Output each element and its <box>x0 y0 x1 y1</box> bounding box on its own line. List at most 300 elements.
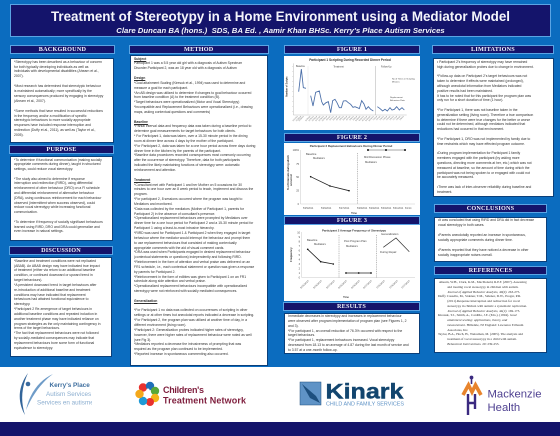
panel: discussion: condition, or continued downward or upward trend in <box>14 273 93 277</box>
phase divider <box>356 153 358 204</box>
logo strip <box>0 367 560 422</box>
x axis labels: 7/26/2014 <box>389 279 399 290</box>
panel: limitations: participant was not being spoken to or engaged with could not <box>437 171 530 175</box>
panel: purpose: learned using RIRD, DRO and DRA could generalize and <box>14 225 100 229</box>
panel: limitations: questions, directing more comments at her, etc.) which was not <box>437 161 532 165</box>
phase labels <box>296 65 392 68</box>
panel: limitations <box>433 58 554 197</box>
date labels: 6/11/14 <box>359 115 365 122</box>
date labels: 5/24/14 <box>305 115 312 122</box>
chart title: Participant 2 Average Frequency of Stereotypy <box>322 228 386 232</box>
panel: limitations: only run for a short duration of time (1 hour). <box>437 98 503 102</box>
panel: method: *Consultant met with Participant 1 and her Mother on 5 occasions for 30 <box>134 183 242 187</box>
x axis labels: 5/26/2014 <box>313 279 323 290</box>
panel: references: and treating vocal stereotypy in children with autism. <box>447 285 519 289</box>
axes <box>302 232 415 278</box>
panel: purpose: communication. <box>14 210 38 214</box>
logo: Children's Treatment Network: Treatment Network <box>163 396 247 406</box>
panel: purpose: *The study also aimed to determine if response <box>14 177 85 181</box>
x axis labels: 5/25/2014 <box>303 208 314 210</box>
panel: method: *An AB design was utilized to determine if changes to goal behaviour occurred <box>134 90 251 94</box>
panel: references: Taylor, B.A., Hoch, H., Weissman, M. (2005). The analysis and <box>438 332 523 336</box>
panel: method: minutes to one hour over an 8 week period to teach, implement and discuss the <box>134 187 253 191</box>
panel: method: (contextual statements or questions) independently and following RIRD. <box>134 255 242 259</box>
panel: method: maps, asking contextual questions and comments) <box>134 110 210 114</box>
heading: conclusions <box>434 204 547 213</box>
logo: Mackenzie Health: Health <box>488 402 520 414</box>
generalization line <box>383 238 409 252</box>
heading: references <box>434 266 547 275</box>
x axis labels: 5/30/2014 <box>381 208 392 210</box>
panel: references <box>434 278 547 353</box>
panel: limitations: treatment. <box>437 190 452 194</box>
heading: purpose: PURPOSE <box>46 146 77 153</box>
heading: figure 3 <box>284 216 420 225</box>
panel: discussion: equivalence to stereotypy. <box>14 346 53 350</box>
date labels: 6/4/14 <box>336 115 342 121</box>
phase labels: Generalization <box>381 232 399 236</box>
heading: discussion: DISCUSSION <box>41 247 81 254</box>
panel: method: schedule along side attention and verbal praise. <box>134 279 206 283</box>
panel: limitations: high during generalization probes due to change in environment. <box>437 65 534 69</box>
panel: method: *Target behaviours were operationalized (Motor and Vocal Stereotypy) <box>134 100 239 104</box>
panel: method: *For Participant 2, the program plan was utilized at another time of day, in a <box>134 318 247 322</box>
x axis labels: 7/25/2014 <box>376 279 386 290</box>
panel: references: Journal of Applied Behavior Analysis, 40(2): 263-275. <box>447 290 520 294</box>
panel: limitations: members engaged with the participant (by asking more <box>437 156 520 160</box>
date labels: 6/5/14 <box>339 115 345 121</box>
date labels: 5/29/14 <box>322 115 329 122</box>
panel: discussion: target behaviours). <box>14 278 42 282</box>
treatment line <box>311 91 373 113</box>
y axis labels: 50 <box>296 176 300 179</box>
panel: discussion: *Participant 2 Re-emergence of target behaviours in <box>14 307 92 311</box>
panel: method: *DRA was used when Participants engaged in desired replacement behaviour <box>134 250 250 254</box>
y axis labels: 8 <box>299 240 301 244</box>
panel: method: *For Participant 1 no data was collected on occurrences of scripting in other <box>134 308 247 312</box>
panel: method: *Reported increase in spontaneous commenting also occurred. <box>134 352 229 356</box>
panel: conclusions: •Parents reported that they have noticed a decrease in other <box>438 248 529 252</box>
date labels <box>293 115 405 122</box>
panel: conclusions: vocal stereotypy in both cases. <box>438 223 484 227</box>
phase labels: Mediators <box>365 160 377 164</box>
logo: Kerry's Place: Autism Services <box>46 391 91 398</box>
heading: results <box>283 302 420 311</box>
panel: conclusions: •Parents anecdotally reported an increase in spontaneous, <box>438 233 526 237</box>
phase labels: Post Program Plan <box>344 239 367 243</box>
x axis labels: 5/31/2014 <box>393 208 404 210</box>
chart: figure 2 percentage line chart: occurred <box>289 174 293 186</box>
panel: method: behaviour where the mediator would interrupt the behaviour and prompt them <box>134 236 250 240</box>
panel: background: sensory consequences produced by engaging in stereotypy <box>14 94 103 98</box>
panel: method: *For participant 2, 8 sessions occurred where the program was taught to <box>134 197 242 201</box>
panel: purpose: settings, could reduce vocal stereotypy. <box>14 167 73 171</box>
date labels: 5/19/14 <box>299 115 305 122</box>
heading: references: REFERENCES <box>469 267 512 274</box>
y axis label: Number of Scripts <box>286 76 289 97</box>
panel: discussion: re-introduction of additional baseline and treatment <box>14 288 90 292</box>
heading: results: RESULTS <box>337 303 366 310</box>
panel: references: Duffy Cassella, M., Sidener, T.M., Sidener, D.W., Progar, P.R. <box>438 294 521 298</box>
panel: method: FR1 schedule, i.e., each contextual statement or question was given a response <box>134 265 254 269</box>
phase labels <box>307 232 399 254</box>
panel: purpose: observed (intermittent when success observed), could <box>14 201 95 205</box>
panel: purpose: interruption and redirection (RIRD), using differential <box>14 181 92 185</box>
panel: method: dinner time for a one hour period for Participant 2 and a 15-30 minute period for <box>134 221 253 225</box>
date labels: 7/7/14 <box>393 115 399 121</box>
legend: No of Times in Scripting <box>392 77 416 80</box>
title banner <box>10 4 551 37</box>
panel: purpose: and differential reinforcement of alternative behaviour <box>14 191 94 195</box>
panel: limitations: could not be determined, although mediators indicated that <box>437 122 525 126</box>
panel: method: Treatment <box>134 178 150 182</box>
date labels: 6/10/14 <box>355 115 362 122</box>
panel: limitations: reductions had occurred in that environment. <box>437 127 504 131</box>
panel: background: 2007). <box>14 74 24 78</box>
panel: discussion: by socially-mediated consequences may indicate that <box>14 336 94 340</box>
date labels: 6/13/14 <box>365 115 372 122</box>
panel: limitations: It has to be noted that for this participant the program plan was <box>437 94 531 98</box>
panel: limitations: positive results had been maintained. <box>437 89 493 93</box>
y axis labels: 0 <box>298 203 300 206</box>
panel: discussion: program strategies as the only maintaining contingency in <box>14 322 101 326</box>
x axis labels: 6/27/2014 <box>363 279 373 290</box>
date labels: 7/9/14 <box>399 115 405 121</box>
panel: purpose <box>10 156 113 241</box>
panel: references: Associates, Inc. <box>447 328 468 332</box>
panel: method: indicated the likely maintaining functions of stereotypy were: automatic <box>134 163 240 167</box>
panel: limitations: •There was lack of inter-observer reliability during baseline and <box>437 185 531 189</box>
x axis title: Time <box>351 212 358 215</box>
legend <box>390 77 416 102</box>
panel: limitations: taken to determine if effects were maintained (prolonged), <box>437 79 524 83</box>
panel: references: Journal of Applied Behavior Analysis, 44(1): 169-173. <box>447 308 520 312</box>
panel: limitations: •During program implementation for Participant 1 family <box>437 151 520 155</box>
panel: method: *For Participant 2, data was taken for a one hour period across three days during <box>134 144 255 148</box>
panel: background: responses have included response interruption and <box>14 123 91 127</box>
phase labels: Mediators <box>346 244 358 248</box>
panel: discussion: additional baseline conditions and repeated induction in <box>14 312 97 316</box>
panel: method: Generalization <box>134 299 157 303</box>
y axis labels: 2 <box>299 268 301 270</box>
panel: method: *Incompatible and Replacement Behaviours were operationalized (i.e., drawing <box>134 105 253 109</box>
panel: discussion: terms of the target behaviours. <box>14 326 60 330</box>
panel: method: different environment (living room). <box>134 323 186 327</box>
panel: method: *Mediators reported a decrease the intrusiveness of prompting that was <box>134 342 241 346</box>
x axis labels: 6/25/2014 <box>338 279 348 290</box>
data line <box>311 177 349 191</box>
panel: limitations: time restraints which may have effected program outcome. <box>437 142 525 146</box>
title banner: Treatment of Stereotypy in a Home Environment using a Mediator Model <box>51 9 510 24</box>
phase dividers <box>339 235 377 278</box>
panel: background: for both typically developing individuals as well as <box>14 64 88 68</box>
panel: discussion: *A persistent downward trend in target behaviours after <box>14 283 97 287</box>
panel: limitations: *For Participant 1, there was not baseline taken in the <box>437 108 517 112</box>
panel: method: *Data was collected by the mediators (Mother of Participant 1, parents for <box>134 207 244 211</box>
heading: limitations <box>432 45 554 54</box>
heading: figure 1: FIGURE 1 <box>337 46 367 53</box>
legend: Behaviour Rate <box>390 99 406 102</box>
panel: method: program. <box>134 192 148 196</box>
heading: limitations: LIMITATIONS <box>471 46 515 53</box>
panel: results: *For participant 1, an overall reduction of 76.3% occurred with respect to the <box>288 329 402 333</box>
title banner: Clare Duncan BA (hons.) SDS, BA Ed. , Aamir Khan BHSc. Kerry's Place Autism Services <box>116 26 445 34</box>
heading: figure 2 <box>284 133 420 142</box>
phase labels <box>306 152 391 164</box>
date labels: 6/6/14 <box>343 115 349 121</box>
panel: method: Baseline <box>134 120 148 124</box>
x axis labels: 5/26/2014 <box>321 208 332 210</box>
date labels: 5/25/14 <box>309 115 315 122</box>
panel: conclusions: •It was concluded that using RIRD and DRA did in fact decrease <box>438 218 534 222</box>
date labels: 7/1/14 <box>373 115 379 121</box>
panel: method: stereotypy were not reinforced with socially mediated consequences. <box>134 289 237 293</box>
panel: discussion: *The fact that replacement behaviours were not followed <box>14 331 99 335</box>
baseline line <box>299 69 306 92</box>
panel: background: *Stereotypy has been described as a behaviour of concern <box>14 60 102 64</box>
panel: references: Behavioral Interventions. 20: 239-253. <box>447 342 499 346</box>
panel: limitations: although anecdotal information from Mediators indicated <box>437 84 521 88</box>
panel: method: *Partial interval data and frequency data was taken during a baseline period to <box>134 124 251 128</box>
panel: results: were observed after program implementation of program plan (see Figures 1, 2 <box>288 319 407 323</box>
logo: Children's Treatment Network: Children's <box>163 385 204 395</box>
panel: method: Subject <box>134 57 146 61</box>
panel: method: Design <box>134 76 145 80</box>
panel: discussion: (ABAB). An ABAB design may have indicated true impact <box>14 264 100 268</box>
panel: method <box>130 55 268 366</box>
logo: Children's Treatment Network <box>135 382 247 406</box>
panel: limitations: *Follow-up data on Participant 2's target behaviours was not <box>437 74 527 78</box>
panel: discussion: of treatment (either via return to an additional baseline <box>14 268 95 272</box>
logo: Kinark Child and Family Services: Kinark <box>326 380 404 404</box>
heading: figure 3: FIGURE 3 <box>337 217 367 224</box>
panel: method: Participant 1 using a least-to-most intrusive hierarchy. <box>134 226 214 230</box>
panel: discussion: conditions may have indicated that replacement <box>14 293 86 297</box>
phase labels: Mid Discussion Phase <box>364 155 391 159</box>
x axis labels: 5/27/2014 <box>339 208 350 210</box>
date labels: 6/2/14 <box>329 115 335 121</box>
logo: Kerry's Place <box>20 373 92 415</box>
panel: purpose: even increase in natural settings. <box>14 229 64 233</box>
date labels: 5/26/14 <box>312 115 319 122</box>
logo: Kerry's Place: Kerry's Place <box>50 382 90 389</box>
panel: results: decreased from 18.13 to an average of 4.87 during the last month of service and <box>288 343 409 347</box>
panel: discussion: stereotypy. <box>14 302 30 306</box>
panel: discussion: *Baseline and treatment conditions were not replicated <box>14 259 96 263</box>
panel: purpose: *To determine if functional communication (making socially <box>14 158 102 162</box>
panel: background: *Some methods that have resulted in successful reductions <box>14 109 103 113</box>
x axis labels: 5/27/2014 <box>326 279 336 290</box>
heading: figure 2: FIGURE 2 <box>337 134 367 141</box>
panel: method: required as the program plan continued to be implemented. <box>134 347 223 351</box>
panel: method: determine goal measurements for target behaviours for both clients. <box>134 129 236 133</box>
panel: method: *Participant 2: Generalization probes indicated higher rates of stereotypy, <box>134 328 244 332</box>
panel: background: (Ahearn et al., 2007). <box>14 99 46 103</box>
chart title: Participant 2 Replacement Behaviours During Dinner Period <box>310 144 393 148</box>
panel: method: Participant 1 was a 5.5 year old girl with a diagnosis of Autism Spectrum <box>134 61 242 65</box>
legend <box>367 149 406 151</box>
panel: results: to 3.57 at a one-month follow-up. <box>288 348 338 352</box>
panel: discussion <box>10 257 112 357</box>
date labels: 6/12/14 <box>362 115 369 122</box>
date labels: 7/3/14 <box>379 115 385 121</box>
legend: Replacement <box>390 96 403 99</box>
panel: method: *Reinforcement in the form of edibles was given to Participant 1 on an FR1 <box>134 275 246 279</box>
panel: purpose: *To determine if frequency of socially significant behaviours <box>14 220 103 224</box>
phase labels: During Repair <box>380 250 397 254</box>
date labels: 5/18/14 <box>296 115 303 122</box>
chart: figure 1 line chart of scripting <box>284 56 420 130</box>
panel: references: attainment scaling: applications, theory, and <box>447 318 507 322</box>
panel: background: redirection (Duffy et al., 2011), as well as (Taylor et al., <box>14 128 95 132</box>
heading: method: METHOD <box>184 46 213 53</box>
panel: discussion: behaviours had attained functional equivalence to <box>14 297 88 301</box>
phase labels: Follow-Up <box>381 66 392 68</box>
y axis labels: 6 <box>299 250 301 252</box>
date labels: 6/1/14 <box>326 115 332 121</box>
chart: figure 2 percentage line chart <box>284 143 420 215</box>
panel: method: *Goal attainment Scaling (Kiresuk et al., 1994) was used to determine and <box>134 81 245 85</box>
heading: method <box>129 45 268 54</box>
panel: method: however, there were higher rates of replacement behaviour were noted as well <box>134 333 252 337</box>
heading: background <box>10 45 115 54</box>
panel: conclusions <box>434 217 546 262</box>
panel: discussion: replacement behaviours bore some form of functional <box>14 341 94 345</box>
panel: background: is maintained automatically; more specifically by the <box>14 89 92 93</box>
panel: method: settings or at other times but anecdotal reports indicated a decrease in scripting. <box>134 313 254 317</box>
x axis labels: 6/26/2014 <box>351 279 361 290</box>
x axis title: Time <box>343 296 350 299</box>
panel: limitations: measured at baseline, so the amount of time during which the <box>437 166 530 170</box>
panel: conclusions: socially appropriate comments during dinner time. <box>438 238 513 242</box>
panel: references: measurement. Hillsdale, NJ England: Lawrence Erlbaum <box>447 323 523 327</box>
date labels: 7/6/14 <box>389 115 395 121</box>
phase divider <box>374 66 376 115</box>
panel: method: appropriate comments with the aid of visual comment cards. <box>134 246 224 250</box>
x axis labels <box>303 208 412 210</box>
panel: conclusions: socially inappropriate noises overall. <box>438 253 492 257</box>
heading: background: BACKGROUND <box>39 46 86 53</box>
panel: results: *For participant 1, replacement behaviours increased. Vocal stereotypy <box>288 338 394 342</box>
panel: references: treatment of vocal stereotypy in a child with autism. <box>447 337 517 341</box>
heading: purpose <box>9 145 114 154</box>
y axis title: % of Intervals during which <box>286 155 290 190</box>
y axis labels: 10 <box>297 232 301 234</box>
chart: figure 3 average frequency of stereotypy <box>284 225 420 301</box>
y axis labels: 1 <box>299 272 301 275</box>
y axis labels: 3 <box>299 263 301 266</box>
panel: background: 2005). <box>14 133 24 137</box>
panel: results: target behaviours. <box>288 333 315 337</box>
date labels: 6/8/14 <box>349 115 355 121</box>
date labels: 7/2/14 <box>376 115 382 121</box>
panel: method: Participant 2) in the absence of consultant's presence. <box>134 212 215 216</box>
panel: method: measure a goal for each participant. <box>134 86 188 90</box>
y axis labels: 5 <box>299 254 301 257</box>
date labels: 5/28/14 <box>319 115 325 122</box>
date labels: 6/9/14 <box>353 115 359 121</box>
panel: references: Ahearn, W.H., Clark, K.M., MacDonald, R.P.F. (2007). Assessing <box>439 280 527 284</box>
heading: figure 1 <box>284 45 420 54</box>
y axis labels: 75 <box>296 163 300 166</box>
panel: method: after the occurrence of stereotypy. Therefore, data for both participants <box>134 158 240 162</box>
date labels: 7/4/14 <box>383 115 389 121</box>
panel: background: individuals with developmental disabilities (Ahearn et al., <box>14 69 99 73</box>
panel: background: in the frequency and/or a modification of specific <box>14 114 87 118</box>
date labels: 6/3/14 <box>333 115 339 121</box>
phase labels: Baseline <box>307 238 318 242</box>
y axis labels: 25 <box>296 190 300 192</box>
logo: Mackenzie Health <box>462 376 542 415</box>
panel: method: dinner time in the kitchen by the parents of the participant. <box>134 149 221 153</box>
panel: references: Kiresuk, T.J., Smith, A., Cardillo, J.E. (Eds.). (1994). Goal <box>438 313 517 317</box>
panel: background: stereotypic behaviours to more socially appropriate <box>14 118 91 122</box>
x axis labels: 6/1/14 <box>405 208 412 210</box>
bottom navy band <box>0 422 560 436</box>
panel: purpose: appropriate comments during dinner), taught in structured <box>14 162 101 166</box>
heading: conclusions: CONCLUSIONS <box>467 205 514 212</box>
legend: Minutes <box>392 80 400 83</box>
panel: method: from baseline condition (A) to the treatment condition (B). <box>134 95 220 99</box>
chart title: Participant 1 Scripting During Recorded Dinner Period <box>309 58 391 62</box>
y axis labels: 9 <box>299 236 301 239</box>
x axis labels: 7/27/2014 <box>401 279 411 290</box>
panel: limitations: • Participant 2's frequency of stereotypy may have remained <box>437 60 527 64</box>
phase labels: Mediators <box>314 242 326 246</box>
y axis labels: 4 <box>299 258 301 262</box>
panel: method: *Baseline data procedures recorded consequences most commonly occurring <box>134 153 250 157</box>
y axis labels: 7 <box>299 245 301 248</box>
panel: method: *Operationalized replacement behaviours were prompted by Mediators over <box>134 216 248 220</box>
phase labels: Baseline <box>306 152 317 156</box>
x axis labels <box>300 279 411 290</box>
y axis <box>292 63 407 115</box>
logo: Kinark Child and Family Services <box>300 380 404 408</box>
phase labels: Treatment <box>333 65 344 68</box>
x axis labels: 5/28/2014 <box>357 208 368 210</box>
baseline line <box>308 249 333 264</box>
axes <box>300 150 415 204</box>
panel: limitations: generalization setting (living room). Therefore a true comparison <box>437 113 533 117</box>
date labels: 7/5/14 <box>386 115 392 121</box>
panel: method: * For Participant 1, data was taken, over a 15-30 minute period in the dining <box>134 134 247 138</box>
panel: limitations: to determine if there were true changes for the better or worse <box>437 118 530 122</box>
date labels: 6/7/14 <box>346 115 352 121</box>
panel: method: *Reinforcement in the form of attention and verbal praise was delivered on an <box>134 260 250 264</box>
panel: references: (2011).Response interruption and redirection for vocal <box>447 299 520 303</box>
x axis labels: 5/25/2014 <box>300 279 310 290</box>
logo: Mackenzie Health: Mackenzie <box>488 388 542 400</box>
panel: background: *Most research has determined that stereotypic behaviour <box>14 84 101 88</box>
panel: results: Immediate decreases in stereotypy and increases in replacement behaviour <box>288 314 402 318</box>
panel: method: *RIRD was used for Participant 1 & Participant 2 when they engaged in target <box>134 231 250 235</box>
phase labels: Mediators <box>313 156 325 160</box>
panel: method: to use replacement behaviours that consisted of making contextually <box>134 241 237 245</box>
heading: discussion <box>9 246 113 255</box>
date labels: 7/8/14 <box>396 115 402 121</box>
panel: limitations: *For Participant 1, DRO was not implemented by family due to <box>437 137 530 141</box>
panel: method: *Operationalized replacement behaviours incompatible with operationalized <box>134 284 247 288</box>
panel: results <box>284 313 420 354</box>
panel: purpose: reduce vocal stereotypy while increasing functional <box>14 205 90 209</box>
panel: method: (see Fig 3). <box>134 338 151 342</box>
panel: method: reinforcement and attention. <box>134 168 176 172</box>
y axis title: Frequency <box>289 247 293 262</box>
date labels: 5/27/14 <box>315 115 322 122</box>
date labels: 6/14/14 <box>369 115 375 122</box>
panel: discussion: another treatment phase may have indicated reliance on <box>14 317 99 321</box>
follow-up line <box>377 107 404 111</box>
